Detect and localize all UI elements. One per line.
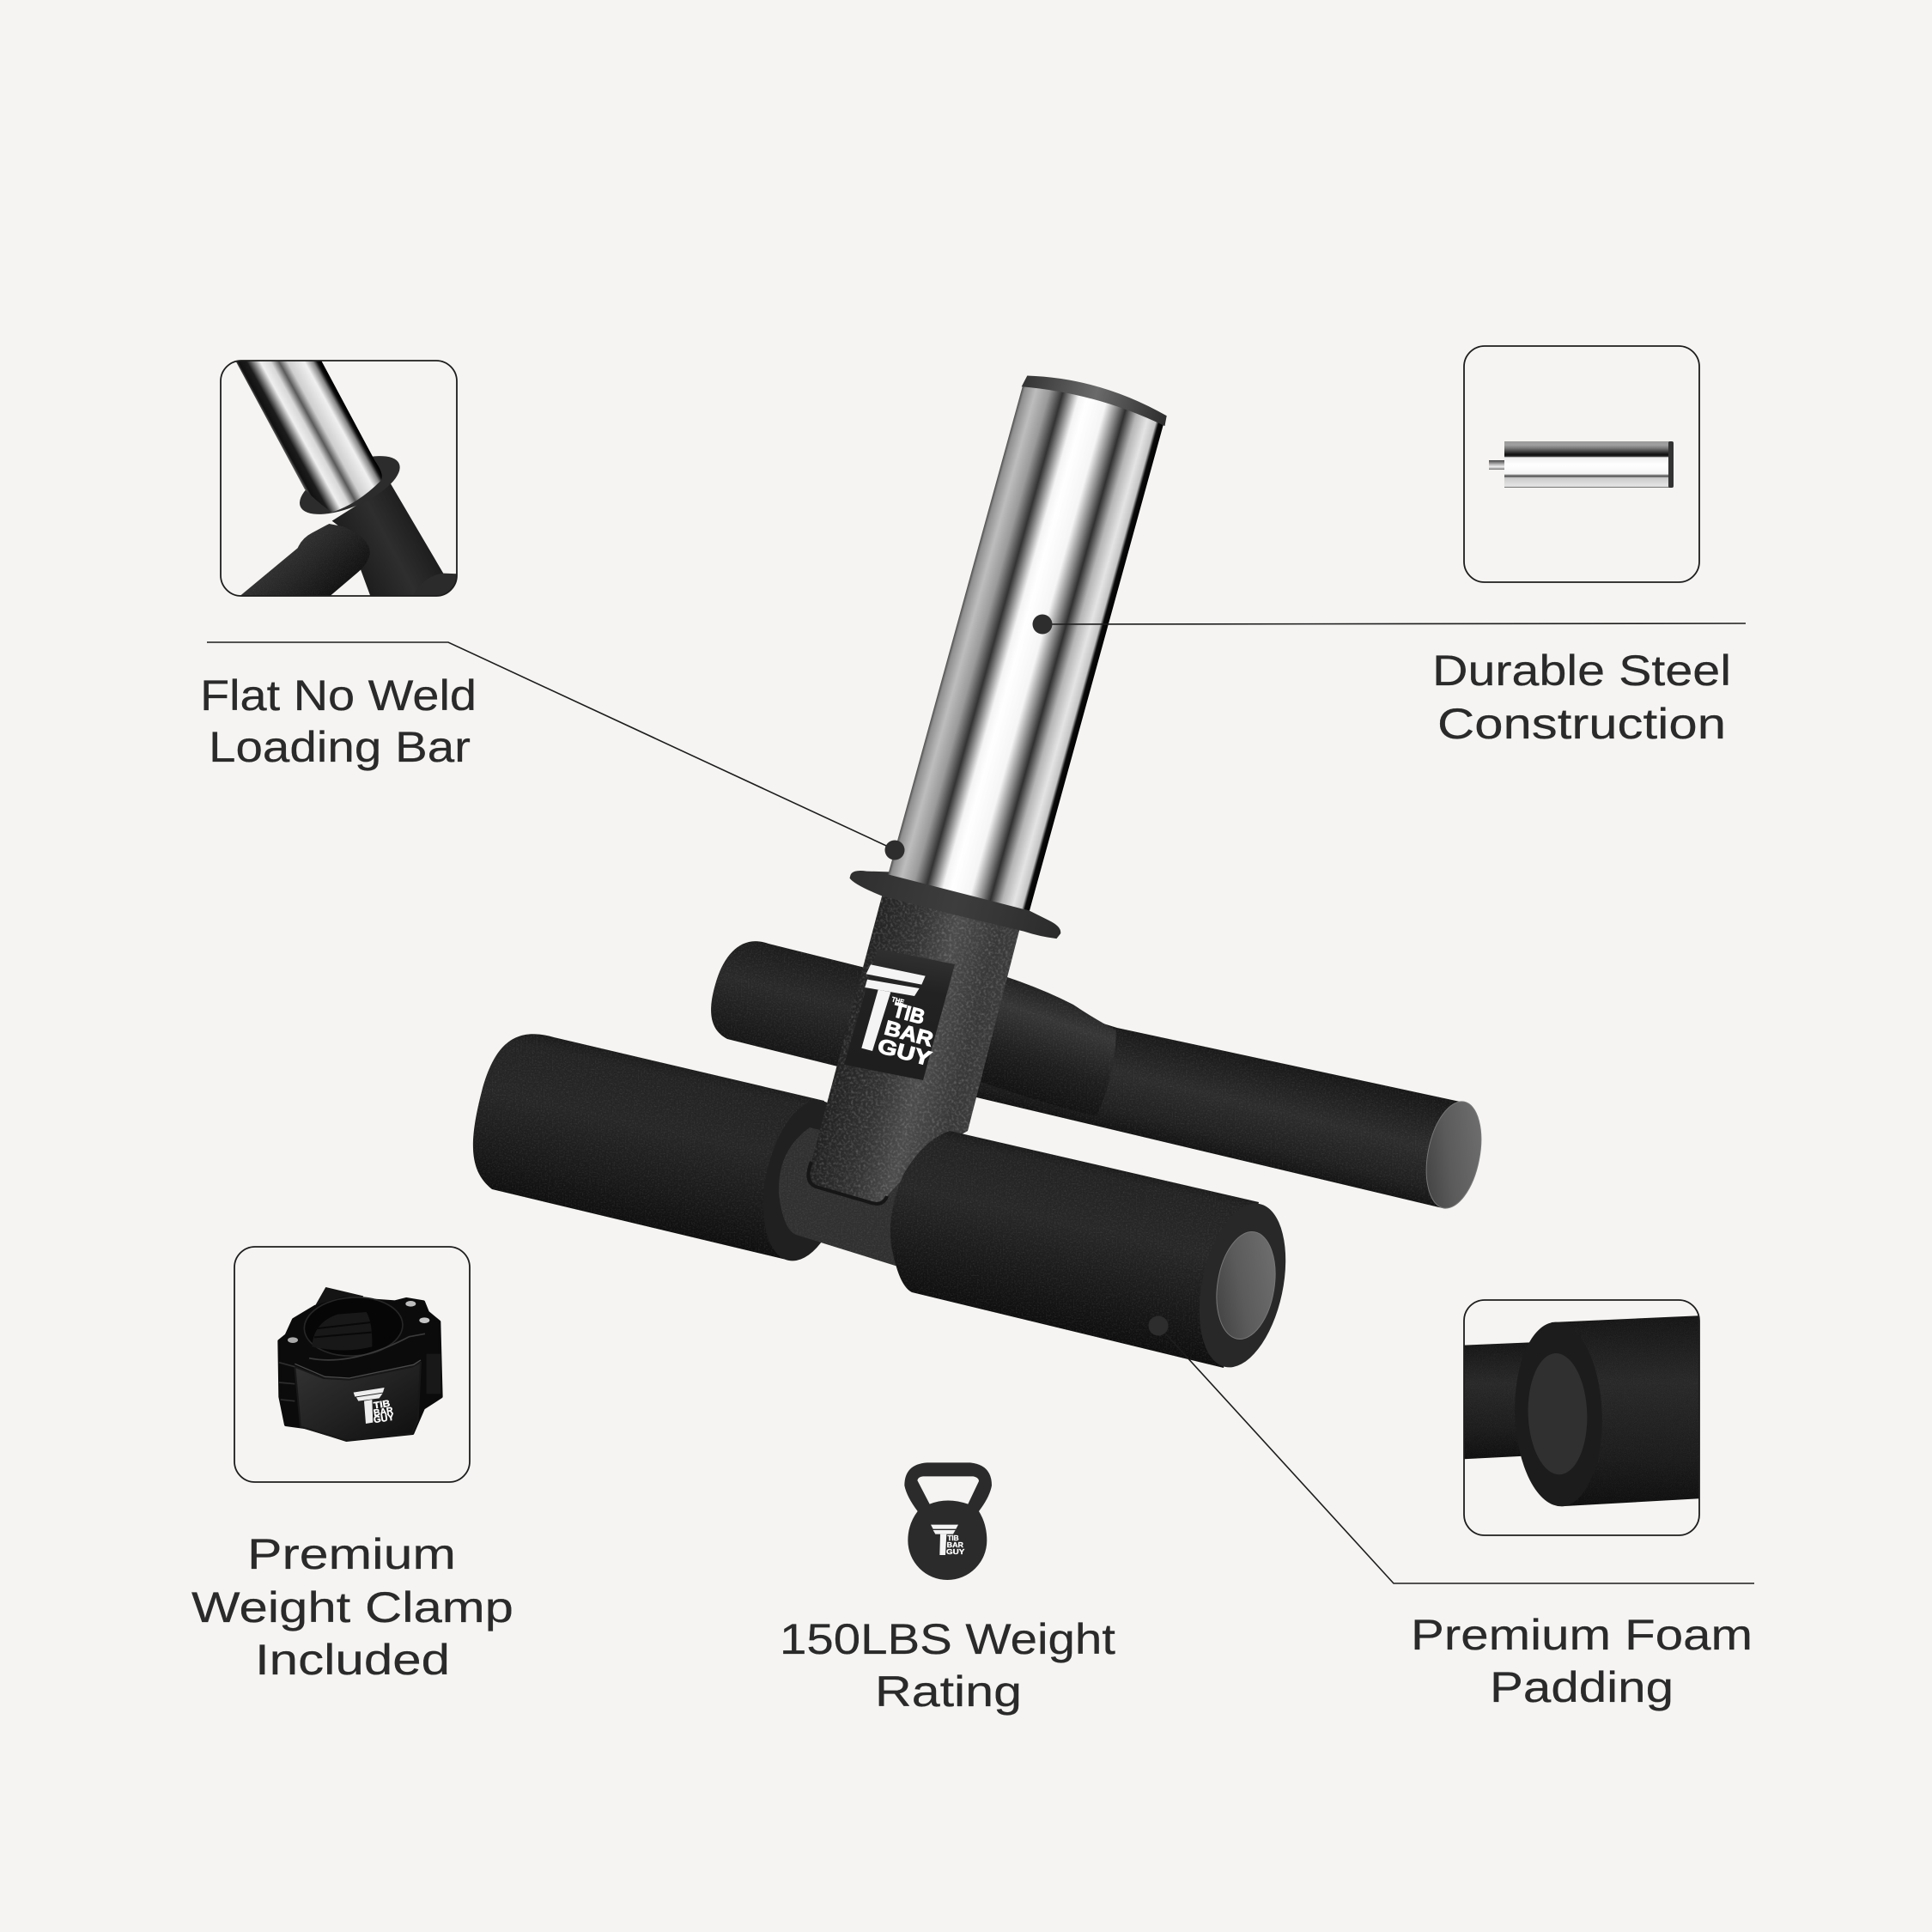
- brand logo: THE: [890, 995, 906, 1006]
- rear foam, right section: [973, 987, 1464, 1208]
- card frame: [1464, 346, 1699, 582]
- vertical neck: [806, 893, 1020, 1204]
- card frame: [234, 1247, 470, 1482]
- card: foam padding detail: [1462, 1300, 1703, 1535]
- rear metal junction: [981, 977, 1116, 1116]
- label: 150lbs weight rating: Rating: [875, 1668, 1022, 1716]
- steel sleeve icon: [1489, 441, 1674, 488]
- rear foam, left section: [711, 941, 910, 1080]
- foam illustration: [1462, 1315, 1703, 1508]
- card: steel sleeve detail: [1464, 346, 1699, 582]
- card frame: [1464, 1300, 1699, 1535]
- card frame: [221, 361, 457, 596]
- clamp logo: [354, 1388, 395, 1425]
- leader line: foam padding: [1149, 1315, 1754, 1583]
- brand logo: TIB: [890, 999, 927, 1030]
- label: flat no weld: Loading Bar: [209, 723, 471, 771]
- sleeve body: [888, 380, 1165, 913]
- clamp logo: BAR: [373, 1406, 394, 1419]
- detail image: [234, 359, 458, 597]
- label: durable steel: [1432, 647, 1731, 748]
- kettlebell logo: TIB: [947, 1534, 959, 1542]
- logo patch: [844, 949, 955, 1080]
- leader line: durable steel: [1032, 615, 1746, 634]
- clamp illustration: [279, 1287, 441, 1440]
- sleeve lid: [1022, 368, 1170, 426]
- label: flat no weld: [200, 671, 477, 771]
- label: premium weight clamp: Included: [255, 1636, 450, 1684]
- label: 150lbs weight rating: [780, 1615, 1115, 1716]
- chrome loading sleeve: [848, 358, 1203, 945]
- label: premium weight clamp: Weight Clamp: [191, 1583, 513, 1631]
- clamp logo: GUY: [373, 1413, 395, 1425]
- front end disc: [1210, 1228, 1282, 1343]
- clamp logo: TIB: [373, 1399, 391, 1412]
- brand logo: GUY: [875, 1035, 933, 1071]
- label: premium weight clamp: Premium: [247, 1530, 456, 1578]
- collar tube: [779, 1127, 936, 1271]
- label: 150lbs weight rating: 150LBS Weight: [780, 1615, 1115, 1663]
- front foam, right section: [890, 1131, 1259, 1368]
- label: premium foam padding: Premium Foam: [1411, 1611, 1753, 1659]
- label: flat no weld: Flat No Weld: [200, 671, 477, 720]
- label: durable steel: Durable Steel: [1432, 647, 1731, 695]
- kettlebell logo: BAR: [947, 1540, 963, 1549]
- label: premium weight clamp: [191, 1530, 513, 1684]
- infographic canvas: [191, 345, 1754, 1716]
- leader line: flat no weld: [207, 642, 905, 860]
- card: weight clamp: [234, 1247, 470, 1482]
- neck saddle shadow: [808, 1162, 887, 1204]
- kettlebell logo: GUY: [946, 1547, 965, 1556]
- front foam, left section: [473, 1034, 824, 1261]
- brand logo: BAR: [882, 1017, 935, 1052]
- label: premium foam padding: [1411, 1611, 1753, 1711]
- front foam inner ring: [750, 1093, 861, 1268]
- label: durable steel: Construction: [1437, 700, 1726, 748]
- icon: kettlebell: [904, 1462, 992, 1580]
- label: premium foam padding: Padding: [1490, 1663, 1674, 1711]
- card: loading bar detail: [221, 359, 458, 597]
- rear end cap: [1419, 1097, 1489, 1213]
- front end cap: [1186, 1195, 1299, 1376]
- flange: [848, 862, 1064, 945]
- kettlebell logo: [931, 1525, 965, 1556]
- product: tib bar: [473, 358, 1489, 1376]
- brand logo: [861, 964, 935, 1071]
